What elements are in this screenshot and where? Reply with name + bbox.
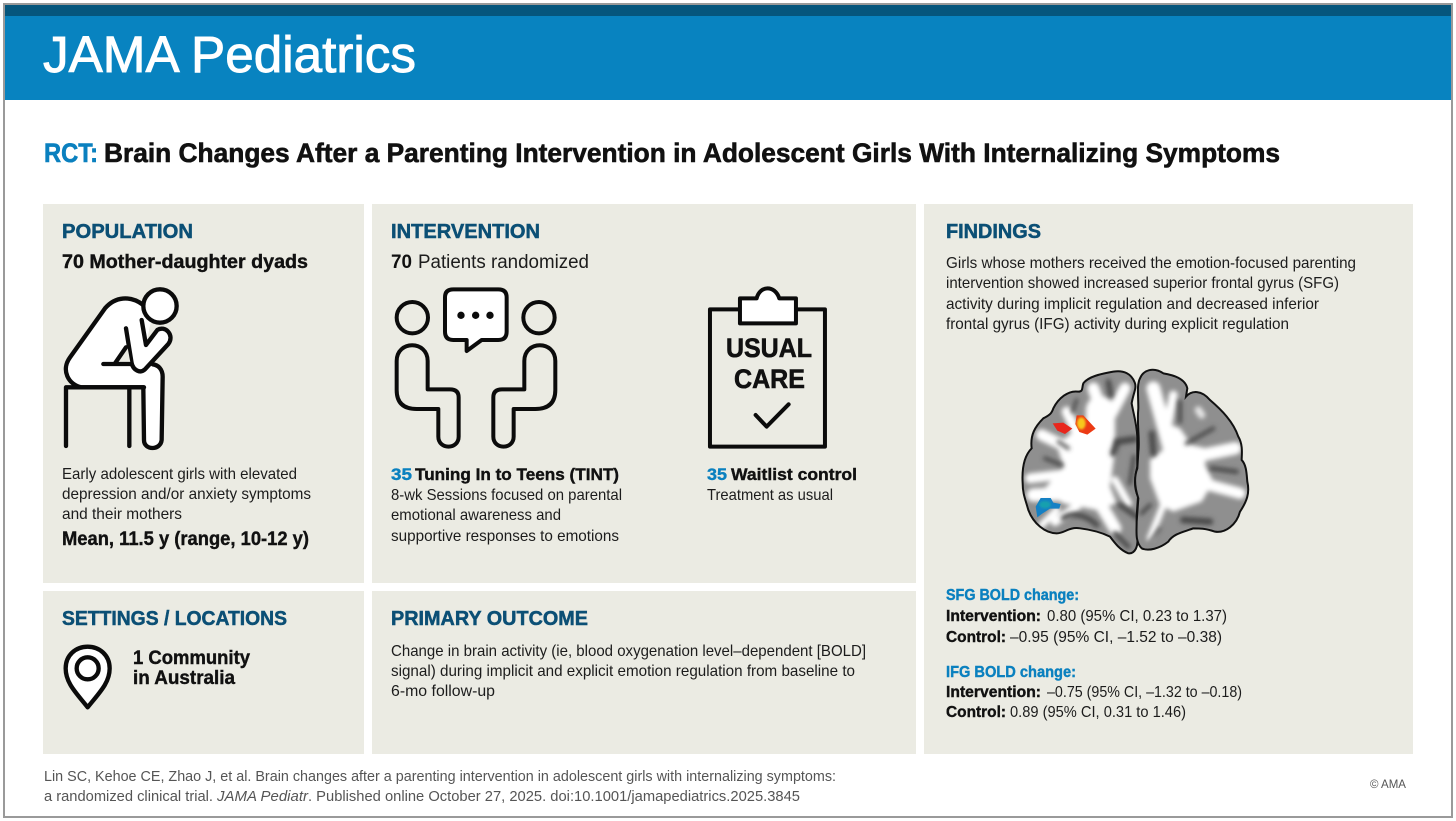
settings text: [133, 648, 250, 689]
IFG results: Control:: [946, 704, 1006, 721]
waitlist arm: Treatment as usual: [707, 487, 833, 504]
TINT arm: supportive responses to emotions: [391, 528, 619, 545]
panel: intervention: [372, 204, 916, 583]
journal name: JAMA Pediatrics: [43, 26, 416, 83]
intervention heading: INTERVENTION: [391, 221, 540, 243]
SFG results: –0.95 (95% CI, –1.52 to –0.38): [1010, 629, 1222, 646]
population heading: POPULATION: [62, 221, 193, 243]
primary outcome text: signal) during implicit and explicit emotion regulation from baseline to: [391, 663, 855, 680]
citation: a randomized clinical trial.: [44, 788, 213, 805]
primary outcome text: Change in brain activity (ie, blood oxygenation level–dependent [BOLD]: [391, 643, 866, 660]
icon: seated person with head in hands: [66, 289, 177, 448]
brain scan: [1022, 370, 1248, 553]
primary outcome heading: PRIMARY OUTCOME: [391, 608, 588, 630]
waitlist arm: Waitlist control: [731, 465, 857, 484]
panel: settings: [43, 591, 364, 754]
white matter: [1150, 388, 1240, 538]
icon: usual care clipboard: [710, 288, 825, 447]
white matter: [1030, 388, 1128, 528]
IFG results: Intervention:: [946, 684, 1041, 701]
population count: 70 Mother-daughter dyads: [62, 252, 308, 273]
IFG results: 0.89 (95% CI, 0.31 to 1.46): [1010, 704, 1186, 721]
title: RCT:: [44, 138, 98, 168]
primary outcome text: 6-mo follow-up: [391, 683, 495, 700]
icon: usual care clipboard: CARE: [734, 364, 805, 394]
citation: . Published online October 27, 2025. doi:10.1001/jamapediatrics.2025.3845: [308, 788, 800, 805]
citation: [44, 768, 836, 805]
mean age: Mean, 11.5 y (range, 10-12 y): [62, 529, 309, 550]
waitlist arm: 35: [707, 465, 727, 484]
TINT arm: [391, 465, 622, 545]
population description: Early adolescent girls with elevated: [62, 466, 297, 483]
title: Brain Changes After a Parenting Intervention in Adolescent Girls With Internalizing Symptoms: [104, 138, 1280, 168]
findings summary: [946, 255, 1356, 333]
randomized count: Patients randomized: [418, 252, 589, 273]
right hemisphere: [1135, 370, 1248, 550]
blue activation: inferior frontal gyrus: [1036, 498, 1061, 517]
citation: Lin SC, Kehoe CE, Zhao J, et al. Brain changes after a parenting intervention in adolescent girls with internalizing symptoms:: [44, 768, 836, 785]
IFG results: [946, 664, 1242, 721]
primary outcome text: [391, 643, 866, 700]
SFG results: [946, 587, 1227, 646]
IFG results: IFG BOLD change:: [946, 664, 1076, 681]
TINT arm: 35: [391, 465, 412, 484]
panel: population: [43, 204, 364, 583]
dark sulci: [1142, 402, 1237, 542]
dark sulci: [1045, 382, 1137, 547]
panel: findings: [924, 204, 1413, 754]
settings heading: SETTINGS / LOCATIONS: [62, 608, 287, 630]
panel: primary outcome: [372, 591, 916, 754]
population description: depression and/or anxiety symptoms: [62, 486, 311, 503]
findings summary: intervention showed increased superior frontal gyrus (SFG): [946, 275, 1339, 292]
IFG results: –0.75 (95% CI, –1.32 to –0.18): [1047, 684, 1242, 701]
waitlist arm: [707, 465, 857, 504]
copyright: © AMA: [1370, 777, 1406, 791]
findings heading: FINDINGS: [946, 221, 1041, 243]
TINT arm: 8-wk Sessions focused on parental: [391, 487, 622, 504]
citation: JAMA Pediatr: [216, 788, 309, 805]
population description: and their mothers: [62, 506, 182, 523]
findings summary: frontal gyrus (IFG) activity during explicit regulation: [946, 316, 1289, 333]
left hemisphere: [1022, 371, 1138, 553]
findings summary: Girls whose mothers received the emotion-focused parenting: [946, 255, 1356, 272]
population description: [62, 466, 311, 523]
settings text: in Australia: [133, 668, 235, 689]
settings text: 1 Community: [133, 648, 250, 669]
TINT arm: emotional awareness and: [391, 507, 561, 524]
SFG results: Intervention:: [946, 608, 1041, 625]
icon: usual care clipboard: USUAL: [726, 333, 812, 363]
header banner: [5, 5, 1451, 100]
SFG results: 0.80 (95% CI, 0.23 to 1.37): [1047, 608, 1227, 625]
TINT arm: Tuning In to Teens (TINT): [415, 465, 619, 484]
randomized count: 70: [391, 252, 412, 273]
icon: location pin: [66, 647, 110, 707]
findings summary: activity during implicit regulation and decreased inferior: [946, 296, 1320, 313]
red activation: superior frontal gyrus: [1053, 415, 1096, 435]
SFG results: Control:: [946, 629, 1006, 646]
SFG results: SFG BOLD change:: [946, 587, 1079, 604]
icon: two people talking: [397, 289, 555, 447]
